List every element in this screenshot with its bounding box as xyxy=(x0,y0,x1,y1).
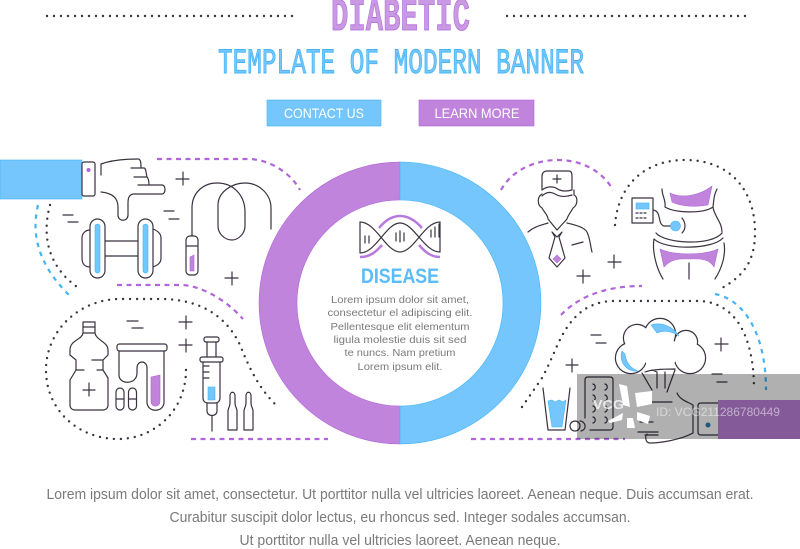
center text block: Lorem ipsum elit. xyxy=(358,361,442,373)
center text block: te nuncs. Nam pretium xyxy=(344,347,456,359)
connector: dotted circle left xyxy=(46,299,278,439)
footer text block: Ut porttitor nulla vel ultricies laoreet. Aenean neque. xyxy=(240,533,560,549)
connector: purple dashed right arc xyxy=(561,286,642,315)
connector: purple dashed bottom left xyxy=(191,438,328,440)
center text block: Pellentesque elit elementum xyxy=(330,321,470,333)
connector: dotted left xyxy=(47,205,77,287)
sleeve and cuff xyxy=(0,160,95,199)
icon: dumbbell xyxy=(82,219,161,278)
purple banner block xyxy=(718,400,800,439)
center text block: consectetur el adipiscing elit. xyxy=(328,307,472,319)
icon: plus marks upper right xyxy=(577,255,621,283)
footer text block: Lorem ipsum dolor sit amet, consectetur. Ut porttitor nulla vel ultricies laoreet. Aenean neque. Duis accumsan erat. xyxy=(46,487,754,503)
icon: hand xyxy=(101,159,165,220)
icon: plus and minus marks upper left xyxy=(63,172,238,285)
icon: broccoli head xyxy=(616,319,705,392)
icon: plus and minus marks lower right xyxy=(566,335,728,382)
button: learn more: LEARN MORE xyxy=(434,105,520,121)
icon: test tube and capsules xyxy=(116,344,167,410)
center text block: Lorem ipsum dolor sit amet, xyxy=(331,294,469,306)
center text block: ligula molestie duis sit sed xyxy=(334,334,467,346)
icon: pills xyxy=(570,421,585,431)
button: contact us xyxy=(267,100,381,126)
icon: doctor xyxy=(528,171,592,267)
subtitle: TEMPLATE OF MODERN BANNER xyxy=(218,44,584,84)
button: learn more xyxy=(419,100,534,126)
connector: blue dashed left xyxy=(36,205,71,297)
watermark: ID: VCG211286780449 xyxy=(656,405,780,419)
header dotted rule left xyxy=(47,15,296,17)
center text block xyxy=(328,294,472,373)
icon: glass of water xyxy=(543,388,570,430)
watermark: VCG xyxy=(593,397,624,412)
icon: cuff with button xyxy=(698,403,718,435)
icon: jump rope xyxy=(186,183,271,275)
icon: dna helix xyxy=(360,216,440,257)
connector: purple dashed mid xyxy=(117,285,243,319)
button: contact us: CONTACT US xyxy=(284,105,364,121)
footer text block xyxy=(46,487,754,549)
icon: ampoules xyxy=(228,392,253,430)
connector: purple dashed top xyxy=(157,159,300,190)
header dotted rule right xyxy=(507,15,750,17)
connector: purple dashed doctor arc xyxy=(501,160,613,190)
connector: blue dashed right arc xyxy=(715,294,766,390)
watermark xyxy=(577,374,800,439)
footer text block: Curabitur suscipit dolor lectus, eu rhoncus sed. Integer sodales accumsan. xyxy=(170,510,630,526)
connector: dotted arc lower right xyxy=(522,301,754,407)
icon: pill blister xyxy=(585,377,613,430)
icon: plus and minus marks lower left xyxy=(127,316,192,352)
icon: syringe xyxy=(200,337,223,431)
connector: dotted circle waist xyxy=(615,160,755,288)
icon: glucose meter and waist xyxy=(632,186,725,279)
heading: disease: DISEASE xyxy=(361,265,439,288)
icon: broccoli hand xyxy=(638,393,693,443)
donut ring xyxy=(259,162,541,444)
connector: purple dashed bottom right xyxy=(471,438,625,440)
icon: bottle xyxy=(70,322,108,410)
